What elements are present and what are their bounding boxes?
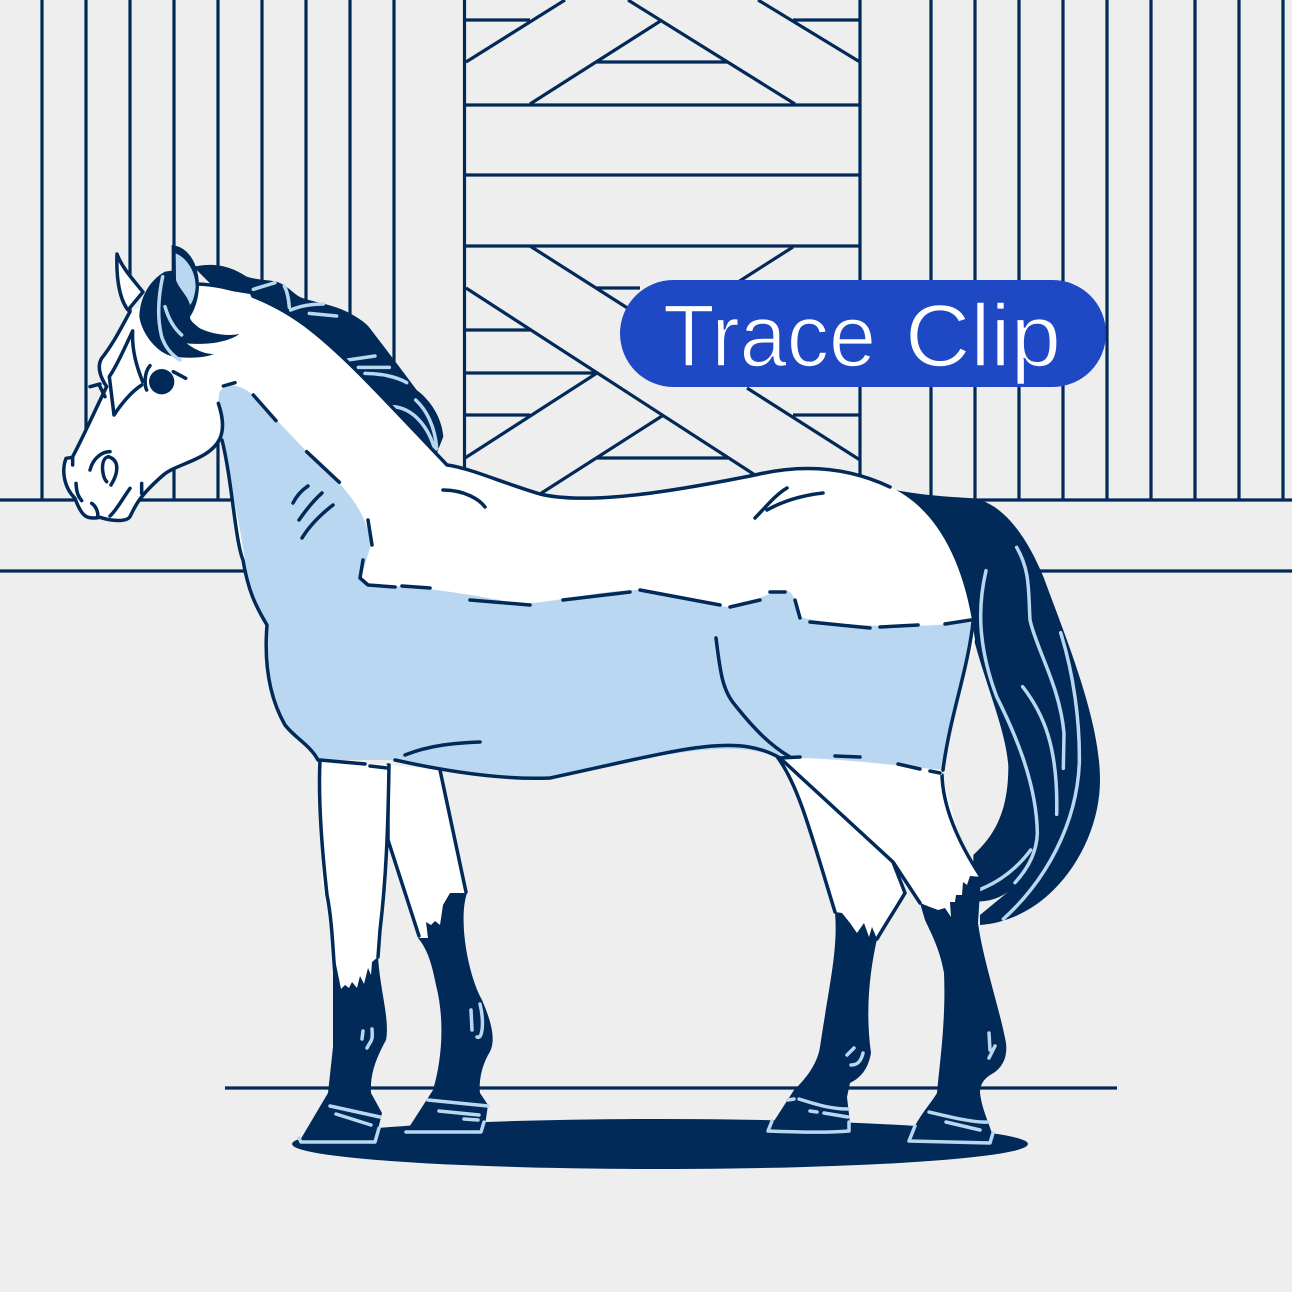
far front leg xyxy=(388,765,493,1132)
label pill: Trace Clip: Clip xyxy=(905,286,1061,385)
ground shadow xyxy=(292,1119,1028,1169)
near hind leg xyxy=(780,758,1006,1143)
left ear xyxy=(117,254,143,310)
label pill: Trace Clip xyxy=(620,280,1106,387)
mane xyxy=(193,265,443,453)
near front leg xyxy=(299,760,390,1142)
forelock xyxy=(139,270,239,358)
eye xyxy=(149,369,174,394)
stable door xyxy=(464,0,860,500)
far hind leg xyxy=(767,755,905,1132)
nostril and mouth xyxy=(76,452,142,517)
muscle lines xyxy=(293,486,823,757)
body outline xyxy=(197,284,973,778)
neck dashes on head xyxy=(223,383,339,482)
floor line xyxy=(225,1086,1117,1090)
label pill: Trace Clip: Trace xyxy=(663,286,876,385)
head xyxy=(64,245,339,521)
horse xyxy=(64,245,1100,1143)
horse body and neck xyxy=(195,283,975,778)
stable wall: vertical slats xyxy=(0,0,1292,571)
clip line dashes xyxy=(320,520,971,773)
tail xyxy=(880,487,1100,925)
clipped area: blue coat xyxy=(218,386,973,778)
blaze xyxy=(109,331,143,415)
right ear xyxy=(172,245,199,318)
